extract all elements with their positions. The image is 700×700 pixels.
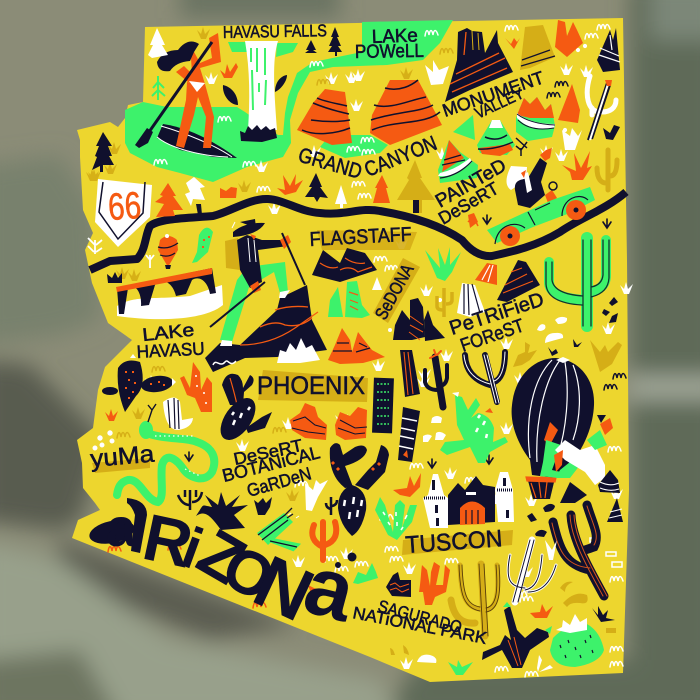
icons: dark rocks and specks southeast [527,470,623,537]
heading: Desert Botanical Garden: BOTANiCAL [220,442,322,486]
icon: dark cactus near Phoenix [214,374,272,446]
heading: Grand Canyon: GRAND [296,144,364,184]
small scattered marks [93,24,633,677]
heading: Sedona: SeDONA [371,261,418,323]
heading: Painted Desert: PAINTeD [432,155,510,212]
icon: dark pine tree [92,132,114,172]
icon: Tucson mission [423,472,514,528]
heading: Arizona wordmark: O [212,532,285,615]
icon: white striped cactus pad [163,398,193,430]
green lake and Colorado river [125,20,453,182]
heading: Desert Botanical Garden [220,436,322,501]
icon: white grass [545,540,557,560]
icon: London Bridge at Lake Havasu [116,268,223,319]
icon: ochre outlined saguaro [451,564,500,636]
heading: Sagurado National Park: NATiONAL PARK [351,603,489,648]
heading: Phoenix: PHOENIX [257,372,365,400]
icon: dark prickly pear center [330,443,389,536]
icons: striped rock, orange dome, strata rock [457,260,540,317]
heading: Monument Valley: MONUMENT [440,67,547,121]
heading: Flagstaff: FLAGSTAFF [309,224,412,251]
heading: Havasu Falls: HAVASU FALLS [223,21,327,42]
icon: green barrel cactus with white flower [550,614,604,667]
heading: Arizona wordmark: a [106,498,137,558]
heading: Lake Havasu [136,320,205,362]
heading: Lake Powell: POWeLL [355,41,424,63]
icon: big green saguaro cactus [546,238,609,326]
heading: Desert Botanical Garden: GaRDeN [245,463,314,501]
icons: northeast buttes [425,20,620,85]
icons: Sedona dark rocks [393,298,445,341]
icon: northeast white cactus [562,76,620,150]
heading: Arizona wordmark: i [174,515,211,582]
heading: Monument Valley: VALLEY [473,85,527,123]
icons: Painted Desert hills [438,84,580,183]
icon: white striped black saguaro [464,352,505,403]
icon: hiker on mountain [205,219,327,372]
icon: green prickly pear with blobs [423,392,508,463]
icons: Flagstaff mountains and green rocks [312,248,385,364]
heading: Grand Canyon [296,132,440,184]
heading: Petrified Forest: PeTRiFieD [447,289,547,340]
icon: black saguaro [425,350,447,407]
icon: Monument Valley butte [445,28,513,102]
heading: Lake Powell: LAKe [371,25,418,48]
icons: southern plants and blobs [390,582,616,675]
icon: orange agave and green finger cactus [353,473,421,584]
heading: Petrified Forest: FOReST [458,315,527,357]
icon: route 66 shield [95,179,152,247]
route 66 road [90,192,626,270]
icon: big rust saguaro [552,505,607,596]
heading: Arizona wordmark [87,498,366,640]
icons: white blobs and dark specks [513,297,622,372]
heading: Arizona wordmark: a [295,537,366,640]
heading: Painted Desert: DeSeRT [435,178,502,228]
heading: Arizona wordmark: R [137,499,199,582]
heading: Sagurado National Park: SAGURADO [376,597,464,637]
icons: city buildings [372,350,420,462]
icons: mid-north trees [155,160,435,217]
icons: cactus group under Botanical Garden [178,480,337,560]
icon: green snake [117,404,214,502]
heading: Arizona wordmark: Z [186,514,258,598]
icon: route 66 shield: 66 [107,185,143,229]
icon: green agave and ochre cactus [425,247,461,317]
icon: white outline saguaro [508,540,556,602]
heading: Lake Havasu: LAKe [141,320,195,345]
icon: barrel cactus hot-air balloon [512,357,613,499]
heading: Lake Powell [355,25,424,63]
icon: desert plants by jeep [468,138,617,228]
heading: Grand Canyon: CANYON [361,132,440,182]
icon: green jeep with driver [487,148,595,246]
icon: waterfall [240,41,278,142]
heading: Yuma: yuMa [89,440,156,473]
icon: orange cactus west [180,362,212,412]
heading: Desert Botanical Garden: DeSeRT [232,436,304,469]
heading: Lake Havasu: HAVASU [136,338,205,362]
icons: orange rocks near Phoenix [290,403,367,440]
icon: dark prickly pear west [102,354,176,412]
icons: northwest trees and plants [148,27,342,105]
Arizona state shape [72,18,629,682]
icons: Grand Canyon rocks [297,80,442,145]
icon: orange cactus south and dark rock [386,562,450,605]
icon: paddleboarder woman [135,33,237,158]
icons: western trees and pots [88,228,213,283]
icon: dark prickly pear south [482,602,552,668]
heading: Arizona wordmark: N [242,539,326,637]
heading: Tuscon: TUSCON [405,525,503,559]
